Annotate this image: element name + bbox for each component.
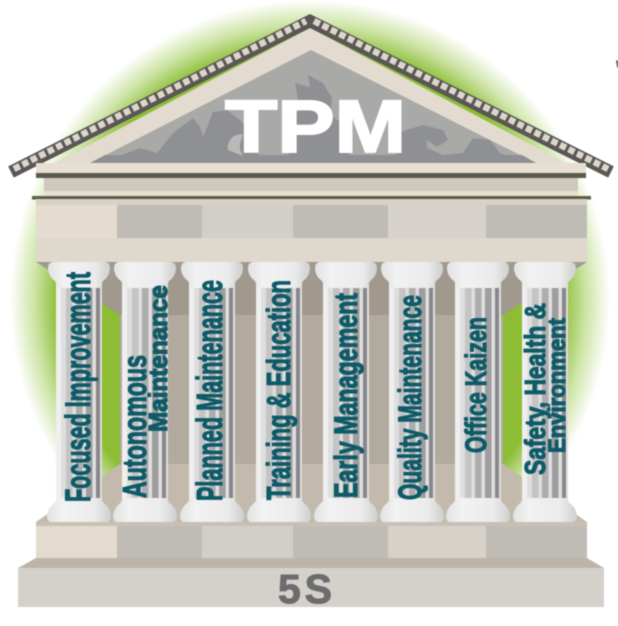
column: Training & Education: Training & Education [260, 280, 297, 500]
base step: 5S: 5S [278, 566, 332, 612]
column: Quality Maintenance: Quality Maintenance [392, 295, 428, 500]
column: Focused Improvement [47, 262, 111, 524]
pediment [34, 28, 587, 174]
tympanum [90, 50, 536, 163]
TPM heading: TPM [225, 85, 406, 168]
column: Early Management: Early Management [328, 293, 364, 498]
column: Focused Improvement: Focused Improvement [59, 272, 98, 502]
column: Planned Maintenance: Planned Maintenance [189, 280, 230, 501]
column: Autonomous Maintenance: Autonomous [116, 355, 153, 498]
tympanum ornament [90, 75, 536, 163]
column: Autonomous Maintenance [113, 262, 177, 524]
column: Safety, Health & Environment: Safety, Health & [520, 303, 552, 475]
colonnade interior [36, 262, 587, 522]
entablature [32, 163, 591, 263]
column: Early Management [314, 262, 378, 524]
base step: 5S [18, 558, 604, 612]
column: Training & Education [247, 262, 311, 524]
stylobate with stone panels [36, 522, 587, 559]
column: Office Kaizen: Office Kaizen [460, 317, 493, 453]
corner mark [616, 60, 618, 68]
column: Quality Maintenance [380, 262, 444, 524]
tympanum swirl highlights [228, 100, 296, 156]
column: Safety, Health & Environment [513, 262, 577, 524]
column: Office Kaizen [446, 262, 510, 524]
column: Autonomous Maintenance: Maintenance [143, 285, 173, 432]
column: Planned Maintenance [180, 262, 244, 524]
roof cornice [11, 21, 611, 172]
column: Safety, Health & Environment: Environment [544, 318, 571, 453]
